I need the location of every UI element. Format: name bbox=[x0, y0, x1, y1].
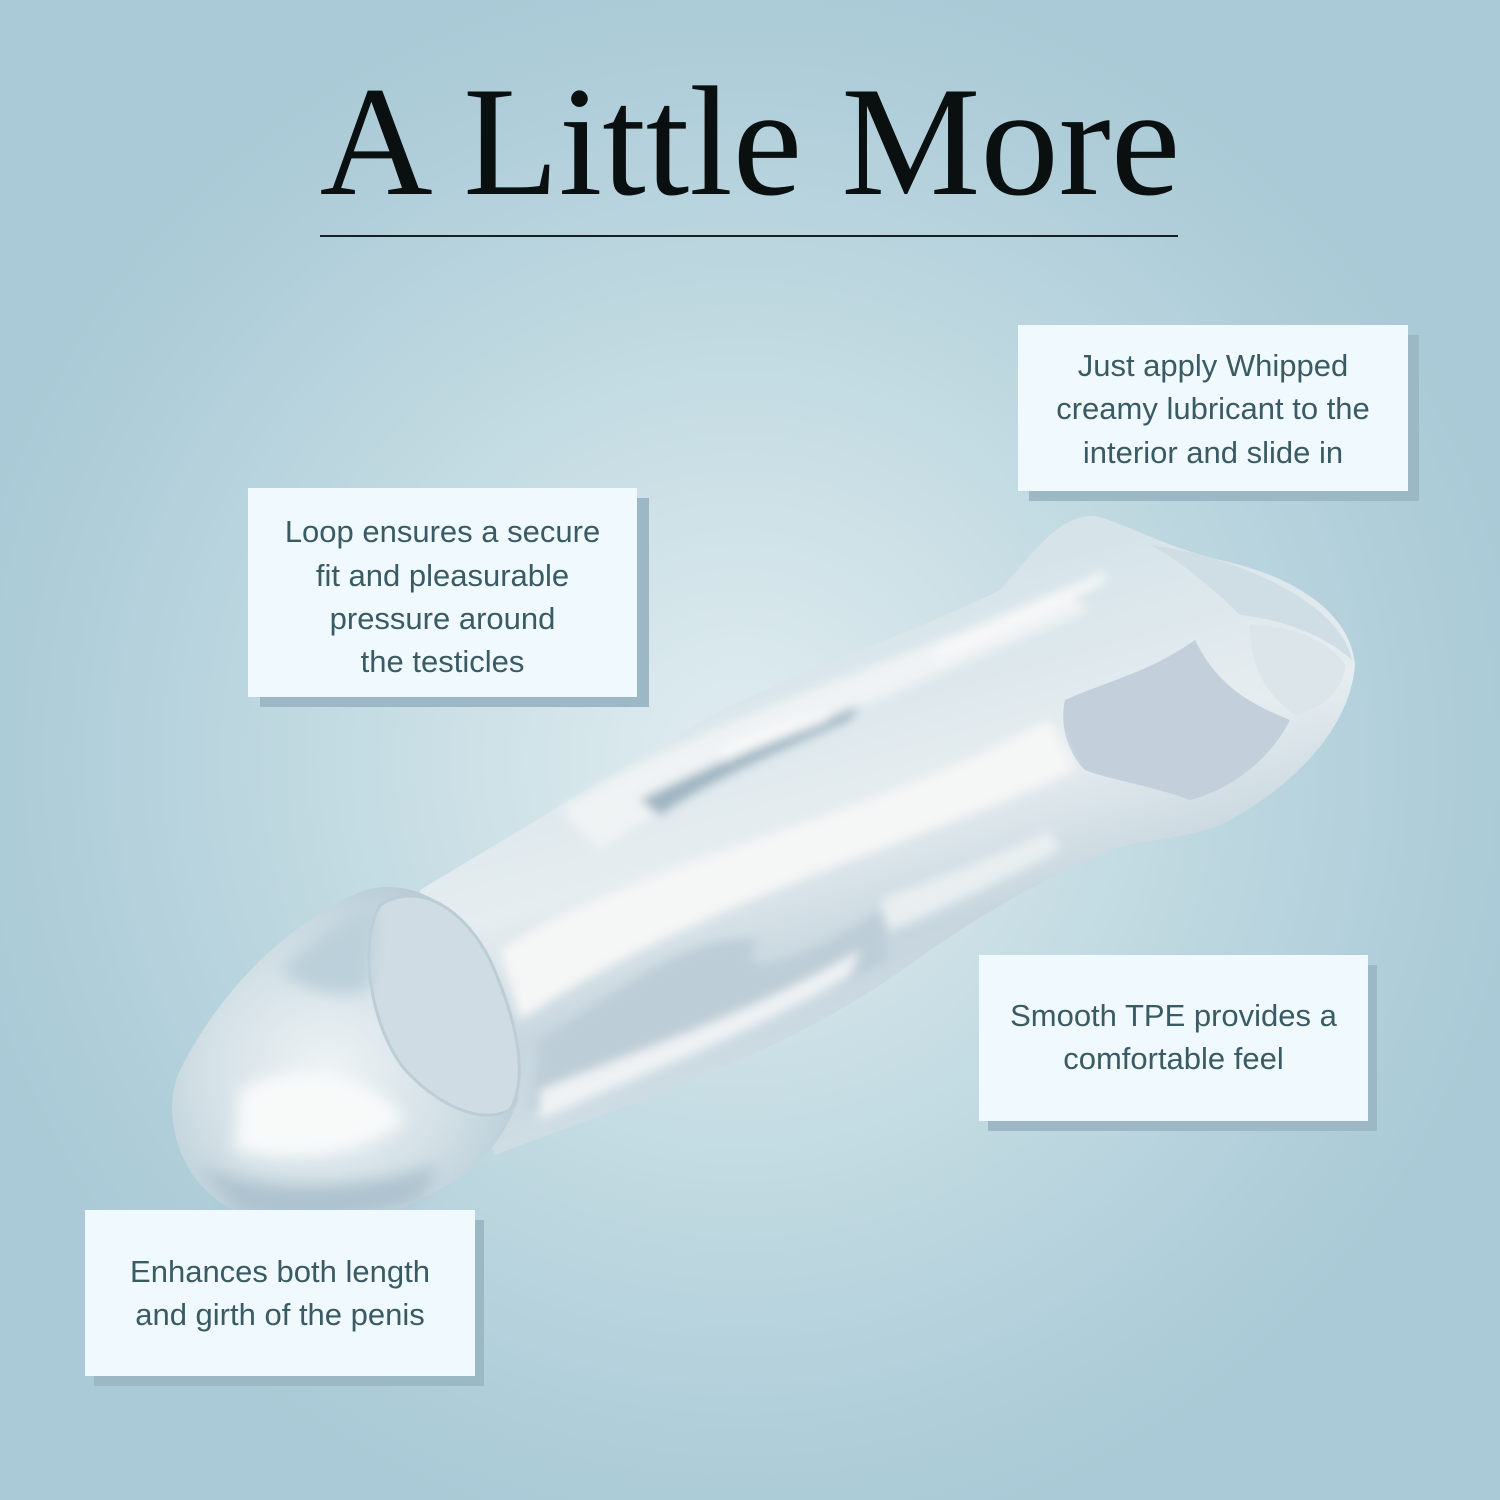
callout: length and girth: and girth of the penis bbox=[135, 1297, 425, 1332]
sleeve body bbox=[420, 516, 1355, 1155]
callout: whipped lubricant: Just apply Whipped bbox=[1078, 348, 1348, 383]
head bbox=[172, 887, 518, 1226]
callout: whipped lubricant bbox=[1018, 325, 1408, 491]
title: A Little More bbox=[320, 55, 1180, 228]
callout: loop: fit and pleasurable bbox=[316, 558, 569, 593]
callout: smooth TPE: comfortable feel bbox=[1063, 1041, 1284, 1076]
callout: length and girth: Enhances both length bbox=[130, 1254, 430, 1289]
callout: whipped lubricant: creamy lubricant to the bbox=[1056, 391, 1370, 426]
callout: smooth TPE bbox=[979, 955, 1368, 1121]
callout: loop: Loop ensures a secure bbox=[285, 514, 600, 549]
callout: loop: the testicles bbox=[361, 644, 524, 679]
ridge bbox=[369, 896, 519, 1115]
callout: length and girth bbox=[85, 1210, 475, 1376]
callout: loop bbox=[248, 488, 637, 697]
callout: smooth TPE: Smooth TPE provides a bbox=[1010, 998, 1337, 1033]
callout: whipped lubricant: interior and slide in bbox=[1083, 435, 1343, 470]
highlights bbox=[500, 570, 1110, 1120]
callout: loop: pressure around bbox=[330, 601, 555, 636]
end flap bbox=[1063, 640, 1290, 800]
